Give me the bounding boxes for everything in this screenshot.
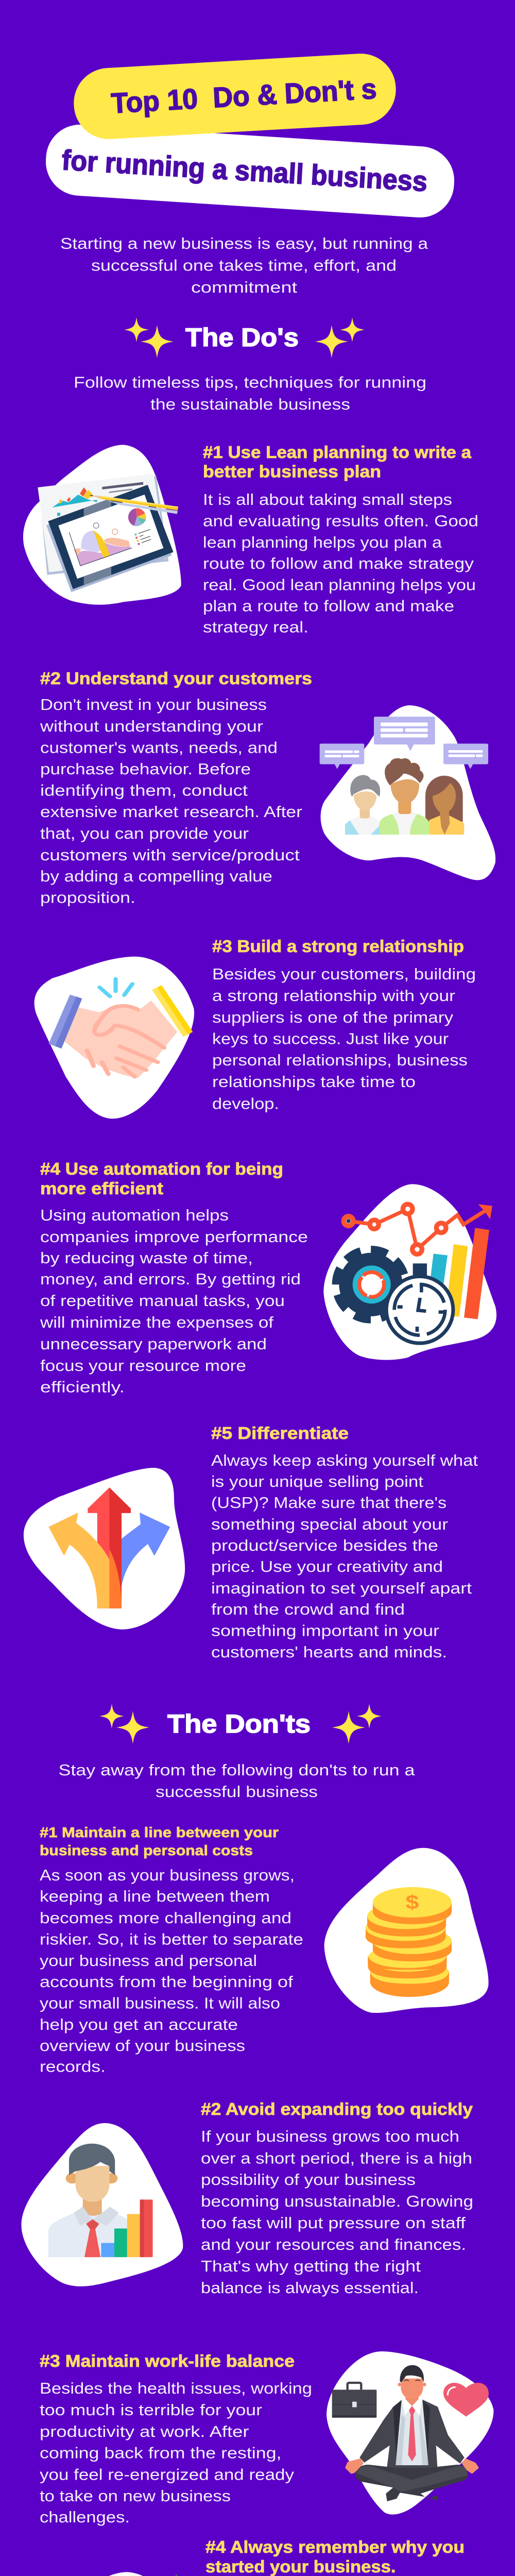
body text: product/service besides the [211, 1536, 438, 1554]
panel: don't 2 expanding [21, 2099, 473, 2297]
body text: by reducing waste of time, [40, 1249, 253, 1267]
body text: possibility of your business [201, 2171, 416, 2189]
body text: and evaluating results often. Good [203, 512, 478, 530]
body text: relationships take time to [212, 1073, 416, 1091]
body text: Besides your customers, building [212, 965, 476, 983]
section heading: The Do's [124, 317, 365, 358]
title line 1: Top 10 Do & Don't s [110, 73, 377, 119]
body text: challenges. [40, 2508, 130, 2526]
body text: price. Use your creativity and [211, 1557, 443, 1575]
illustration: stack of coins: $ [405, 1892, 419, 1913]
body text [211, 1451, 478, 1661]
body text: a strong relationship with your [212, 987, 455, 1005]
body text: customers with service/product [40, 846, 300, 864]
intro text [60, 234, 428, 296]
body text: too fast will put pressure on staff [201, 2214, 466, 2232]
body text: focus your resource more [40, 1357, 246, 1375]
illustration: handshake [35, 957, 194, 1118]
section intro: do's [74, 373, 426, 413]
body text: something important in your [211, 1622, 439, 1639]
briefcase [332, 2383, 376, 2418]
title [44, 52, 456, 219]
body text: customers' hearts and minds. [211, 1643, 447, 1661]
panel: don't 3 work-life balance [40, 2351, 493, 2526]
body text: customer's wants, needs, and [40, 739, 278, 756]
panel: don't 4 remember why [21, 2537, 471, 2576]
section intro: don'ts: Stay away from the following don'ts to run a [59, 1761, 415, 1779]
body text: Besides the health issues, working [40, 2379, 312, 2397]
section heading: The Do's: The Do's [185, 323, 299, 352]
heading: #4 Always remember why you [205, 2537, 465, 2556]
panel: do 5 differentiate [24, 1423, 478, 1661]
body text: identifying them, conduct [40, 781, 248, 800]
title pill: yellow [72, 52, 398, 141]
body text: companies improve performance [40, 1228, 308, 1246]
body text: over a short period, there is a high [201, 2149, 472, 2167]
body text: your small business. It will also [40, 1994, 280, 2012]
body text: by adding a compelling value [40, 867, 272, 885]
body text: becomes more challenging and [40, 1909, 291, 1927]
heading: #1 Maintain a line between your [40, 1824, 279, 1840]
heading: #3 Build a strong relationship [212, 937, 464, 956]
body text: your business and personal [40, 1952, 257, 1970]
panel: do 3 relationship [35, 937, 476, 1118]
body text: strategy real. [203, 618, 308, 636]
body text: help you get an accurate [40, 2015, 238, 2033]
body text: proposition. [40, 888, 135, 907]
illustration: gear, stopwatch and growth chart [323, 1184, 496, 1360]
woman [425, 776, 464, 835]
illustration: target with arrow [21, 2572, 189, 2576]
body text: coming back from the resting, [40, 2444, 281, 2462]
heading: #1 Use Lean planning to write a [203, 443, 472, 462]
body text: riskier. So, it is better to separate [40, 1930, 303, 1948]
man [345, 2365, 479, 2501]
section intro: don'ts: successful business [156, 1783, 318, 1801]
section heading: The Don'ts [99, 1704, 382, 1744]
body text: develop. [212, 1094, 279, 1113]
body text: something special about your [211, 1515, 448, 1533]
body text: It is all about taking small steps [203, 490, 452, 509]
heading: started your business. [205, 2557, 396, 2576]
body text: accounts from the beginning of [40, 1973, 293, 1991]
heading: more efficient [40, 1179, 163, 1198]
body text: Using automation helps [40, 1206, 229, 1224]
panel: do 2 customers [40, 669, 495, 907]
body text [40, 1866, 303, 2075]
body text: balance is always essential. [201, 2279, 419, 2297]
heading [205, 2537, 465, 2576]
body text: unnecessary paperwork and [40, 1335, 267, 1353]
body text: purchase behavior. Before [40, 760, 251, 778]
section heading: The Don'ts: The Don'ts [167, 1709, 311, 1738]
body text [40, 1206, 308, 1396]
heading: business and personal costs [40, 1842, 253, 1858]
title line 2: for running a small business [61, 144, 428, 197]
body text: productivity at work. After [40, 2422, 249, 2441]
heading [40, 1159, 283, 1198]
body text: imagination to set yourself apart [211, 1579, 472, 1597]
heart [443, 2383, 489, 2417]
body text [212, 965, 476, 1113]
body text: Always keep asking yourself what [211, 1451, 478, 1469]
illustration: tablet with charts and pencil [23, 445, 181, 605]
body text: is your unique selling point [211, 1472, 423, 1490]
body text: and your resources and finances. [201, 2235, 466, 2253]
body text: lean planning helps you plan a [203, 533, 442, 551]
heading [203, 443, 472, 481]
panel: don't 1 line between costs [40, 1824, 489, 2075]
body text: As soon as your business grows, [40, 1866, 295, 1884]
body text: That's why getting the right [201, 2257, 421, 2275]
heading: #2 Understand your customers [40, 669, 312, 688]
heading: #5 Differentiate [211, 1423, 349, 1443]
illustration: three diverging arrows [24, 1468, 185, 1630]
body text: that, you can provide your [40, 824, 249, 842]
body text: overview of your business [40, 2037, 245, 2055]
body text [40, 696, 302, 907]
heading [40, 1824, 279, 1858]
body text: records. [40, 2058, 106, 2075]
body text: suppliers is one of the primary [212, 1008, 454, 1026]
intro text: commitment [191, 278, 297, 296]
body text: personal relationships, business [212, 1051, 468, 1069]
heading: #3 Maintain work-life balance [40, 2351, 295, 2370]
title pill: white [44, 123, 456, 219]
body text: keeping a line between them [40, 1887, 270, 1905]
intro text: successful one takes time, effort, and [91, 257, 397, 274]
illustration: businessman with bar chart [21, 2123, 183, 2286]
body text [201, 2127, 473, 2297]
section intro: don'ts [59, 1761, 415, 1801]
body text [203, 490, 478, 636]
heading: better business plan [203, 462, 381, 481]
body text: too much is terrible for your [40, 2401, 262, 2419]
middle man [380, 758, 429, 835]
heading: #4 Use automation for being [40, 1159, 283, 1178]
body text: from the crowd and find [211, 1600, 405, 1618]
intro text: Starting a new business is easy, but running a [60, 234, 428, 252]
body text: extensive market research. After [40, 803, 302, 821]
body text: route to follow and make strategy [203, 554, 474, 572]
section intro: do's: Follow timeless tips, techniques for running [74, 373, 426, 392]
body text: without understanding your [40, 717, 263, 735]
body text: real. Good lean planning helps you [203, 576, 476, 594]
body text: you feel re-energized and ready [40, 2466, 295, 2483]
illustration: stack of coins [324, 1848, 489, 2013]
body text: will minimize the expenses of [40, 1313, 273, 1331]
panel: do 1 lean planning [23, 443, 478, 636]
section intro: do's: the sustainable business [150, 395, 350, 413]
illustration: three customers with speech bubbles [320, 705, 495, 880]
body text: to take on new business [40, 2487, 231, 2505]
heading: #2 Avoid expanding too quickly [201, 2099, 473, 2119]
body text: plan a route to follow and make [203, 597, 454, 615]
body text: (USP)? Make sure that there's [211, 1494, 447, 1512]
body text: keys to success. Just like your [212, 1029, 449, 1048]
body text: of repetitive manual tasks, you [40, 1292, 285, 1310]
body text: becoming unsustainable. Growing [201, 2192, 473, 2210]
body text: If your business grows too much [201, 2127, 459, 2145]
body text: money, and errors. By getting rid [40, 1270, 301, 1288]
body text: efficiently. [40, 1378, 125, 1396]
body text: Don't invest in your business [40, 696, 267, 714]
panel: do 4 automation [40, 1159, 496, 1396]
body text [40, 2379, 312, 2526]
illustration: meditating businessman with briefcase and heart [327, 2351, 493, 2515]
older man [345, 775, 381, 835]
